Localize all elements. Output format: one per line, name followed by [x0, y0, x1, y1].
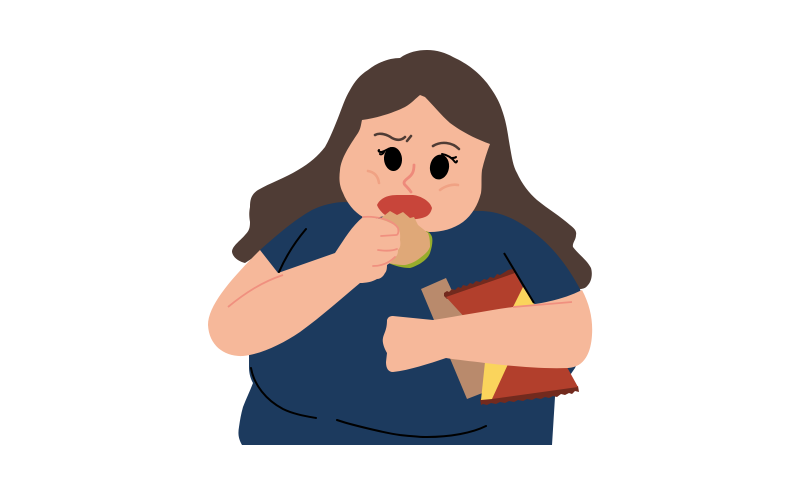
chip bag crimped top edge — [444, 269, 518, 299]
shirt crease near bag — [504, 253, 534, 303]
right lashes — [442, 154, 457, 162]
face — [339, 95, 490, 232]
sleeve crease — [279, 229, 306, 272]
body crease left — [251, 368, 316, 418]
right eye — [428, 153, 451, 181]
nose — [404, 165, 414, 192]
chip bag body — [446, 273, 578, 399]
finger lines — [363, 217, 398, 266]
left lashes — [379, 148, 391, 154]
left arm and fist — [208, 217, 400, 356]
left cheek line — [368, 171, 379, 183]
forearm crease — [513, 302, 572, 307]
chip bag crimped bottom edge — [480, 386, 579, 405]
right forearm and fist — [383, 290, 592, 372]
torso: navy shirt — [238, 202, 592, 445]
paper bag back panel — [421, 278, 496, 399]
yellow stripe lower part — [481, 362, 509, 400]
snack bag group — [421, 269, 579, 405]
body crease bottom — [337, 420, 486, 437]
burger — [372, 211, 432, 268]
left eyebrow — [375, 134, 411, 141]
right cheek line — [440, 185, 458, 190]
lettuce — [386, 231, 432, 268]
hair — [232, 50, 592, 289]
bun — [372, 211, 430, 265]
yellow stripe upper part — [512, 287, 535, 309]
arm crease — [228, 275, 283, 307]
right eyebrow — [433, 143, 459, 149]
left eye — [383, 146, 403, 172]
mouth — [377, 195, 432, 220]
